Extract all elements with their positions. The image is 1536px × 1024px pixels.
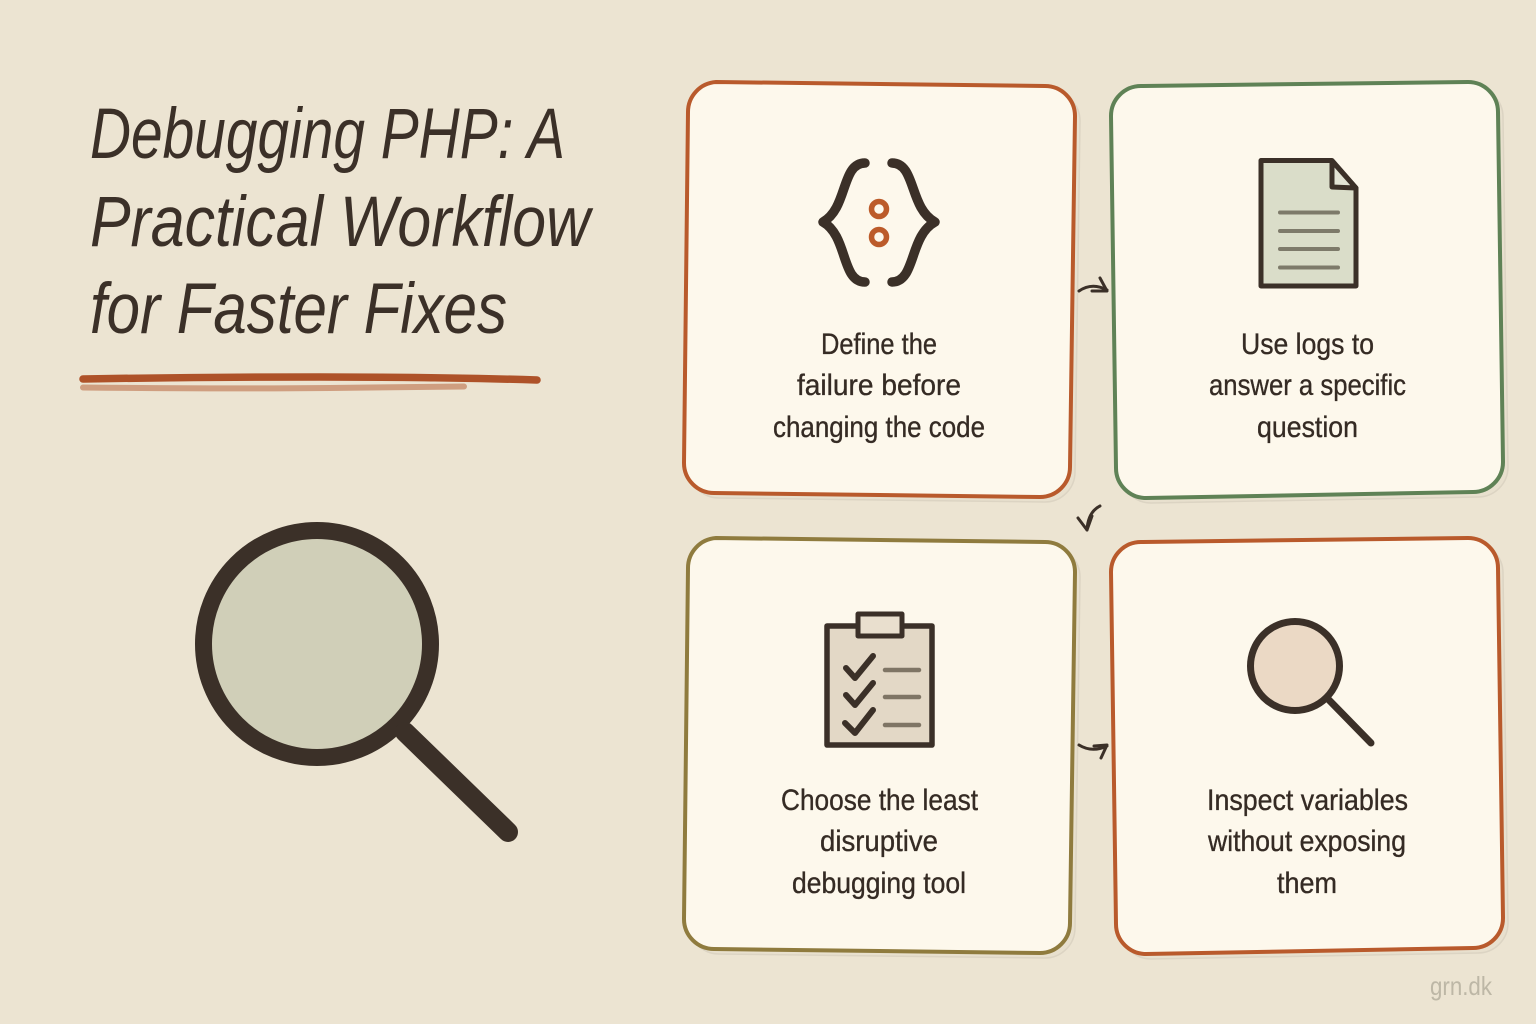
panel: inspect variables [1111,538,1508,959]
title underline [83,377,537,388]
panel: use logs [1111,82,1508,503]
arrow: step two to step three [1078,506,1100,530]
icon: clipboard checklist [827,614,932,745]
icon: large magnifying glass [204,530,508,832]
panel: define the failure [684,82,1080,502]
icon: code braces [823,163,935,282]
text: step four [1207,784,1408,900]
arrow: step three to step four [1079,745,1107,758]
text: step one [773,328,985,444]
text: step two: answer a specific [1209,369,1406,402]
panel: choose the tool [684,538,1080,958]
title [90,93,593,349]
text: step four: them [1277,867,1337,900]
text: step one: failure before [797,369,961,402]
title: Practical Workflow [90,181,593,262]
arrow: step one to step two [1079,278,1107,291]
text: step two [1209,328,1406,444]
icon: log document [1261,160,1356,286]
text: step one: Define the [821,328,937,361]
text: step two: Use logs to [1241,328,1374,361]
text: step four: Inspect variables [1207,784,1408,817]
text: step three: disruptive [820,825,938,858]
watermark: grn.dk [1430,971,1493,1001]
text: step three [781,784,979,900]
title: Debugging PHP: A [90,93,565,174]
text: step four: without exposing [1207,825,1406,858]
title: for Faster Fixes [90,268,507,349]
text: step three: Choose the least [781,784,979,817]
text: step two: question [1257,411,1358,444]
icon: small magnifying glass [1250,622,1371,743]
text: step one: changing the code [773,411,985,444]
text: step three: debugging tool [792,867,966,900]
